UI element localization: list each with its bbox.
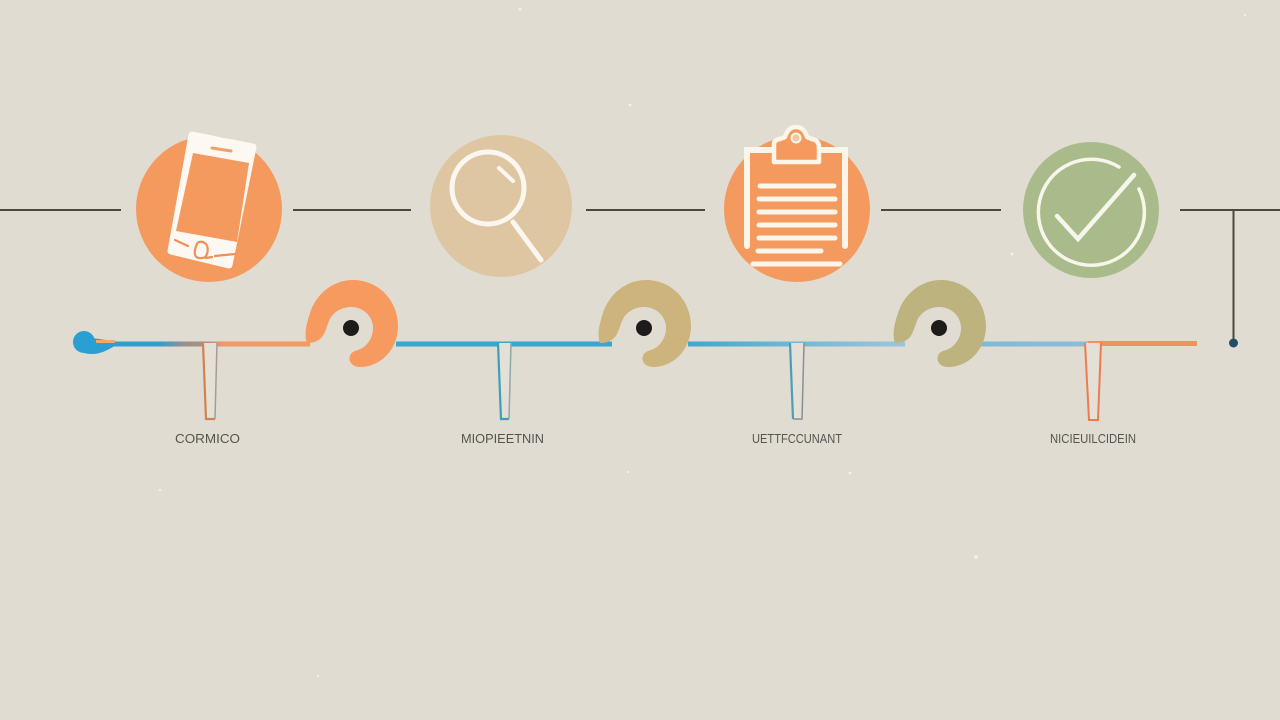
label 1: CORMICO bbox=[175, 431, 240, 446]
label 4: NICIEUILCIDEIN bbox=[1050, 431, 1136, 446]
label 2: MIOPIEETNIN bbox=[461, 431, 544, 446]
pin 2 bbox=[498, 343, 511, 419]
pin 4 bbox=[1085, 343, 1101, 420]
hook node 3 bbox=[894, 280, 986, 367]
top connector line segments bbox=[0, 209, 1280, 211]
pin 1 bbox=[203, 343, 217, 419]
pin 3 bbox=[790, 343, 804, 419]
hook node 2 bbox=[599, 280, 691, 367]
icon: check mark on green circle bbox=[1023, 142, 1159, 278]
right vertical connector with end dot bbox=[1229, 210, 1238, 348]
timeline segments bbox=[96, 341, 1197, 346]
hook node 1 bbox=[306, 280, 398, 367]
icon: smartphone on orange circle bbox=[136, 135, 282, 282]
icon: clipboard on orange circle bbox=[724, 127, 870, 282]
label 3: UETTFCCUNANT bbox=[752, 431, 842, 446]
background speckles bbox=[159, 8, 1246, 677]
icon: magnifier on tan circle bbox=[430, 135, 572, 277]
timeline start blob bbox=[73, 331, 120, 354]
